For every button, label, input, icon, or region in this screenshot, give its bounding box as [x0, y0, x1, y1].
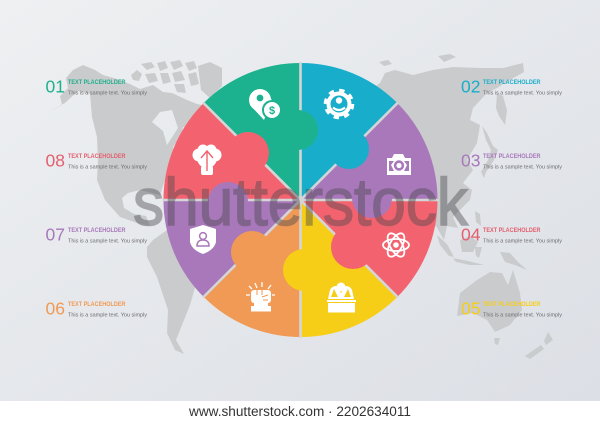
segment 5: yellow — [300, 200, 397, 337]
number 08: 08 — [46, 150, 65, 170]
body 05: This is a sample text. You simply — [483, 312, 562, 318]
heading 03: TEXT PLACEHOLDER — [483, 153, 541, 160]
item 03 — [461, 150, 562, 170]
number 02: 02 — [461, 76, 480, 96]
heading 07: TEXT PLACEHOLDER — [68, 227, 126, 234]
icon: location pin with dollar coin: $ — [269, 105, 275, 117]
body 06: This is a sample text. You simply — [68, 312, 147, 318]
map: eurasia — [370, 63, 524, 240]
icon: shield with person — [190, 225, 216, 254]
number 03: 03 — [461, 150, 480, 170]
body 01: This is a sample text. You simply — [68, 90, 147, 96]
map: maritime southeast asia — [437, 211, 527, 270]
puzzle tab: green — [278, 110, 318, 150]
number 07: 07 — [46, 224, 65, 244]
map: japan — [481, 126, 498, 178]
heading 01: TEXT PLACEHOLDER — [68, 79, 126, 86]
segment 3: purple — [300, 103, 438, 200]
item 02 — [461, 76, 562, 96]
body 04: This is a sample text. You simply — [483, 238, 562, 244]
item 05 — [461, 298, 562, 318]
puzzle tab: purple left — [208, 182, 248, 222]
puzzle tab: purple right — [352, 178, 392, 218]
icon: camera — [387, 154, 411, 175]
icon: location pin with dollar coin — [249, 89, 282, 120]
puzzle tab: red right — [331, 225, 375, 269]
body 07: This is a sample text. You simply — [68, 238, 147, 244]
icon: brain with lightbulb — [192, 144, 222, 175]
footer bar — [0, 401, 600, 421]
map: arctic islands — [131, 60, 222, 98]
body 03: This is a sample text. You simply — [483, 164, 562, 170]
icon: gear with person — [325, 90, 353, 118]
item 06 — [46, 298, 147, 318]
segment 7: purple — [163, 200, 300, 297]
item 07 — [46, 224, 147, 244]
heading 08: TEXT PLACEHOLDER — [68, 153, 126, 160]
map: south america — [147, 230, 200, 354]
map: kamchatka — [496, 93, 507, 125]
number 06: 06 — [46, 298, 65, 318]
world map — [48, 54, 553, 359]
heading 06: TEXT PLACEHOLDER — [68, 301, 126, 308]
map: tasmania and new zealand — [494, 332, 553, 359]
item 08 — [46, 150, 147, 170]
puzzle tab: yellow — [283, 249, 325, 291]
puzzle circle — [162, 62, 438, 338]
body 02: This is a sample text. You simply — [483, 90, 562, 96]
footer text: www.shutterstock.com · 2202634011 — [188, 404, 411, 419]
icon: raised fist — [246, 282, 275, 312]
segment 1: green — [204, 63, 300, 200]
number 05: 05 — [461, 298, 480, 318]
icon: atom — [383, 231, 409, 259]
heading 05: TEXT PLACEHOLDER — [483, 301, 541, 308]
item 01 — [46, 76, 147, 96]
map: northern islands — [379, 54, 456, 66]
number 01: 01 — [46, 76, 65, 96]
segment 6: orange — [204, 200, 300, 337]
map: north america — [48, 65, 208, 226]
segment 2: blue — [300, 63, 397, 200]
icon: speaker at podium — [327, 282, 356, 312]
map: australia — [457, 270, 522, 332]
puzzle tab: orange — [231, 231, 273, 273]
watermark: shutterstock — [133, 165, 468, 240]
segment 8: red — [163, 103, 300, 200]
heading 04: TEXT PLACEHOLDER — [483, 227, 541, 234]
heading 02: TEXT PLACEHOLDER — [483, 79, 541, 86]
segment 4: red — [300, 200, 438, 297]
puzzle tab: red left — [227, 132, 269, 174]
body 08: This is a sample text. You simply — [68, 164, 147, 170]
item 04 — [461, 224, 562, 244]
number 04: 04 — [461, 224, 481, 244]
puzzle tab: blue — [329, 129, 369, 169]
